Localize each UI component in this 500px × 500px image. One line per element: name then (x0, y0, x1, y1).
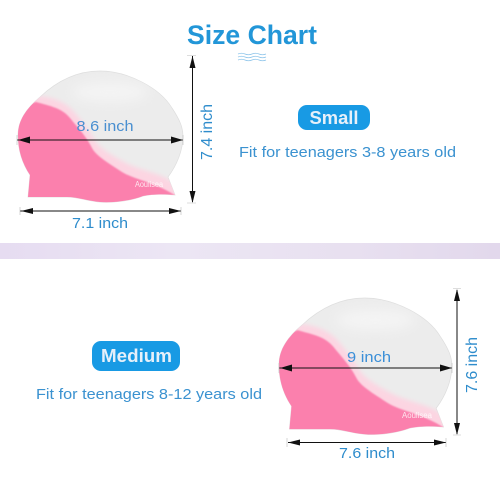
label: 7.4 inch: 7.4 inch (199, 104, 216, 160)
small swim cap (10, 71, 183, 210)
label: 7.6 inch bottom: 7.6 inch (339, 445, 395, 462)
small bottom arrow (20, 207, 181, 215)
badge: Small: Small (310, 108, 358, 128)
medium swim cap (271, 298, 452, 443)
text: medium fit: Fit for teenagers 8-12 years old (36, 387, 262, 403)
medium height arrow (453, 288, 461, 435)
title: Size Chart (187, 20, 317, 50)
medium bottom arrow (287, 438, 446, 447)
label: 7.1 inch: 7.1 inch (72, 215, 128, 232)
icon: waves under title (238, 53, 266, 61)
small height arrow (187, 56, 196, 203)
medium width arrow (279, 363, 452, 373)
text: cap brand medium: Aoulisea (402, 411, 433, 420)
badge: Medium: Medium (101, 346, 172, 366)
label: 7.6 inch side: 7.6 inch (464, 337, 481, 393)
text: cap brand small: Aoulisea (135, 180, 164, 189)
text: small fit: Fit for teenagers 3-8 years old (239, 145, 456, 161)
badge: Medium (92, 341, 180, 371)
badge: Small (298, 105, 370, 130)
small width arrow (17, 135, 183, 145)
label: 8.6 inch: 8.6 inch (76, 118, 134, 135)
divider band (0, 243, 500, 259)
label: 9 inch: 9 inch (347, 349, 391, 366)
